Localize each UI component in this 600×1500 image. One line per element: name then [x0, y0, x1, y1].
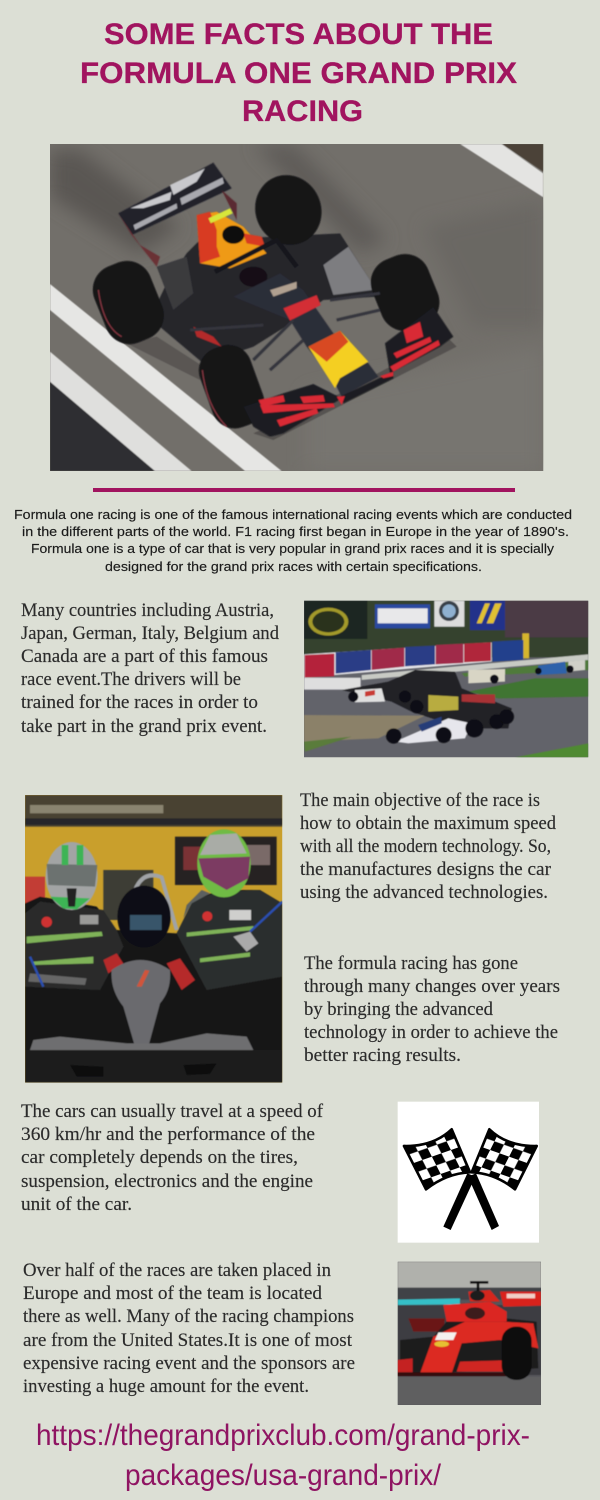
link: source URL: https://thegrandprixclub.com/grand-prix-: [36, 1419, 530, 1452]
text block: car speed: car completely depends on the tires,: [21, 1148, 298, 1168]
link: source URL: [36, 1419, 530, 1492]
text block: car speed: [21, 1102, 324, 1215]
photo: historic grand prix race: [304, 601, 588, 757]
text block: participating countries: Canada are a part of this famous: [21, 647, 268, 667]
text block: race objective: The main objective of the race is: [300, 791, 540, 811]
text block: participating countries: Many countries including Austria,: [21, 601, 274, 621]
text block: changes over years: The formula racing has gone: [304, 954, 518, 974]
photo: red Ferrari F1 car: [397, 1262, 541, 1405]
text block: changes over years: through many changes over years: [304, 977, 560, 997]
text block: changes over years: technology in order to achieve the: [304, 1023, 558, 1043]
text block: race objective: with all the modern technology. So,: [300, 837, 551, 857]
text block: car speed: unit of the car.: [21, 1195, 132, 1215]
text block: participating countries: race event.The drivers will be: [21, 670, 241, 690]
title: SOME FACTS ABOUT THE: [104, 18, 493, 51]
intro text: [14, 507, 572, 574]
text block: race objective: the manufactures designs the car: [300, 860, 551, 880]
intro text: Formula one racing is one of the famous international racing events which are conducted: [14, 507, 572, 522]
text block: races in Europe: investing a huge amount for the event.: [23, 1377, 309, 1397]
text block: participating countries: take part in the grand prix event.: [21, 717, 267, 737]
title: RACING: [242, 95, 363, 128]
text block: participating countries: Japan, German, Italy, Belgium and: [21, 624, 280, 644]
text block: races in Europe: [23, 1261, 355, 1397]
text block: race objective: using the advanced technologies.: [300, 883, 548, 903]
text block: changes over years: [304, 954, 560, 1066]
text block: races in Europe: there as well. Many of the racing champions: [23, 1307, 354, 1327]
title: [80, 18, 517, 128]
divider bar: [93, 488, 515, 492]
text block: car speed: The cars can usually travel at a speed of: [21, 1102, 324, 1122]
car: [85, 163, 453, 437]
text block: car speed: 360 km/hr and the performance of the: [21, 1125, 315, 1145]
photo: kart racing team: [25, 795, 282, 1083]
text block: race objective: how to obtain the maximum speed: [300, 814, 557, 834]
text block: car speed: suspension, electronics and the engine: [21, 1172, 313, 1192]
photo: Red Bull F1 car on track: [50, 144, 543, 471]
text block: races in Europe: Europe and most of the team is located: [23, 1284, 323, 1304]
text block: races in Europe: Over half of the races are taken placed in: [23, 1261, 331, 1281]
text block: races in Europe: expensive racing event and the sponsors are: [23, 1354, 355, 1374]
intro text: designed for the grand prix races with certain specifications.: [105, 559, 482, 574]
text block: changes over years: better racing results.: [304, 1046, 461, 1066]
text block: participating countries: trained for the races in order to: [21, 693, 258, 713]
text block: races in Europe: are from the United States.It is one of most: [23, 1331, 353, 1351]
intro text: Formula one is a type of car that is very popular in grand prix races and it is specially: [31, 541, 555, 556]
text block: changes over years: by bringing the advanced: [304, 1000, 494, 1020]
text block: race objective: [300, 791, 557, 903]
link: source URL: packages/usa-grand-prix/: [125, 1459, 442, 1492]
title: FORMULA ONE GRAND PRIX: [80, 57, 517, 90]
intro text: in the different parts of the world. F1 racing first began in Europe in the year of 1890's.: [22, 524, 569, 539]
text block: participating countries: [21, 601, 280, 737]
icon: crossed checkered flags: [398, 1102, 539, 1243]
